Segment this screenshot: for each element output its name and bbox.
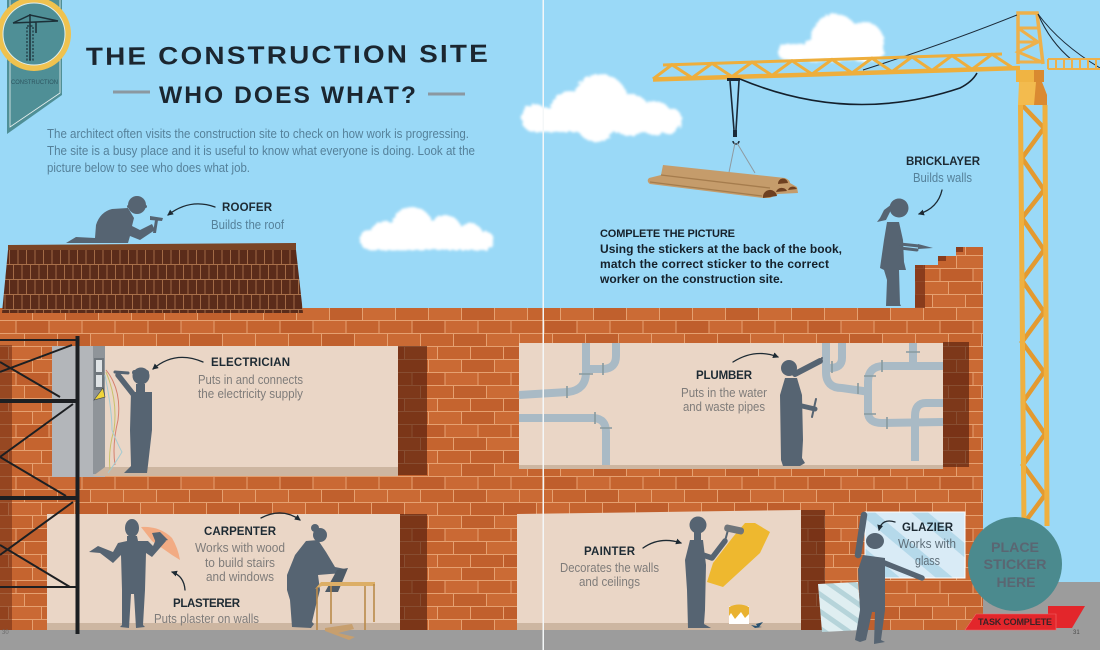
ground	[0, 582, 1100, 650]
hook block	[727, 78, 740, 144]
plumber silhouette	[780, 358, 822, 466]
sticker placeholder	[968, 517, 1062, 611]
label: plasterer	[154, 598, 259, 626]
work board	[325, 568, 348, 592]
room: painter	[517, 510, 825, 630]
label: electrician: ELECTRICIAN	[211, 357, 290, 369]
bricklayer stepped wall	[915, 247, 983, 308]
label: roofer: ROOFER	[222, 202, 273, 214]
medal	[0, 0, 71, 71]
roof	[2, 243, 303, 313]
glazier scene	[818, 512, 965, 644]
label: plumber	[681, 370, 767, 414]
wood planks on floor	[325, 624, 355, 640]
crane icon	[13, 14, 58, 60]
cloud top right behind crane	[778, 14, 884, 62]
table	[315, 582, 375, 630]
subtitle: WHO DOES WHAT?	[159, 82, 418, 109]
dark column	[943, 342, 969, 467]
label: electrician: the electricity supply	[198, 387, 304, 401]
window glass	[865, 512, 965, 578]
crane tower top	[1018, 13, 1043, 64]
tower crane	[648, 13, 1100, 526]
cloud by roofer	[360, 207, 494, 251]
centre page fold	[542, 0, 544, 650]
intro paragraph: The architect often visits the construction site to check on how work is progressing.	[47, 127, 469, 141]
plaster patch	[141, 527, 180, 560]
task complete banner: TASK COMPLETE	[978, 617, 1052, 627]
label: carpenter: CARPENTER	[204, 526, 277, 538]
cloud centre	[522, 74, 682, 142]
title line 1: THE CONSTRUCTION SITE	[86, 40, 490, 71]
carpenter silhouette	[287, 524, 345, 628]
painter silhouette	[685, 516, 725, 628]
dark column	[400, 514, 427, 630]
glazier silhouette	[855, 515, 922, 644]
arrow to plumber	[733, 353, 778, 362]
wall step shadows	[915, 247, 963, 308]
label: electrician	[198, 357, 304, 401]
complete the picture instructions: worker on the construction site.	[599, 272, 783, 286]
label: carpenter	[195, 526, 285, 584]
label: glazier: glass	[915, 554, 940, 568]
construction badge	[0, 0, 71, 134]
paint can	[729, 604, 749, 624]
trolley cable	[740, 73, 977, 104]
spare glass pane	[818, 582, 862, 632]
crane cables	[863, 14, 1100, 70]
label: bricklayer: Builds walls	[913, 171, 972, 185]
label: carpenter: to build stairs	[205, 556, 275, 570]
hazard sign	[94, 388, 105, 400]
label: roofer: Builds the roof	[211, 218, 284, 232]
intro paragraph: The site is a busy place and it is useful to know what everyone is doing. Look at the	[47, 144, 475, 158]
subtitle rules	[113, 92, 465, 94]
brick building	[0, 247, 983, 630]
arrow to electrician	[153, 357, 203, 369]
scaffolding	[0, 336, 78, 634]
label: plumber: and waste pipes	[683, 400, 765, 414]
label: painter: Decorates the walls	[560, 561, 659, 575]
arrow to carpenter	[261, 513, 300, 520]
page number right: 31	[1073, 630, 1080, 636]
arrow to bricklayer	[919, 190, 942, 214]
left pillar shadow	[0, 345, 12, 630]
paint roller	[724, 524, 745, 541]
arrow to roofer	[168, 204, 215, 215]
water pipes	[519, 343, 943, 465]
crane cab	[1016, 70, 1047, 105]
yellow paint	[707, 523, 770, 587]
electrician silhouette	[115, 368, 152, 473]
badge label: CONSTRUCTION	[11, 80, 58, 86]
roof ridge	[8, 243, 296, 250]
label: painter: and ceilings	[579, 575, 640, 589]
room: plumber	[519, 342, 969, 469]
title	[86, 40, 490, 109]
label: glazier: Works with	[898, 537, 956, 551]
complete the picture instructions	[599, 228, 842, 286]
label: plasterer: PLASTERER	[173, 598, 241, 610]
complete the picture instructions: COMPLETE THE PICTURE	[600, 228, 735, 240]
label: glazier: GLAZIER	[902, 522, 954, 534]
label: plasterer: Puts plaster on walls	[154, 612, 259, 626]
bricklayer silhouette	[877, 198, 933, 306]
complete the picture instructions: match the correct sticker to the correct	[600, 257, 829, 271]
label: plumber: Puts in the water	[681, 386, 767, 400]
intro paragraph: picture below to see who does what job.	[47, 161, 250, 175]
grey wall	[52, 346, 105, 477]
crane mast	[1020, 105, 1047, 526]
crane counter jib	[1048, 59, 1100, 69]
slings	[725, 143, 755, 192]
dark column	[801, 510, 825, 630]
page number left: 30	[2, 630, 9, 636]
paint brush	[751, 622, 763, 628]
task complete banner	[965, 606, 1085, 630]
main wall	[0, 308, 983, 630]
room wall	[105, 346, 398, 468]
label: glazier	[898, 522, 956, 568]
label: carpenter: Works with wood	[195, 541, 285, 555]
hammer	[150, 216, 163, 233]
load of wooden beams	[648, 165, 798, 198]
sticker placeholder: HERE	[996, 574, 1036, 590]
complete the picture instructions: Using the stickers at the back of the book,	[600, 242, 842, 256]
label: plumber: PLUMBER	[696, 370, 753, 382]
plasterer silhouette	[89, 519, 168, 628]
label: bricklayer: BRICKLAYER	[906, 156, 981, 168]
intro paragraph	[47, 127, 475, 175]
ribbon	[7, 0, 62, 134]
fuse boxes	[94, 358, 104, 390]
arrow to painter	[643, 540, 681, 548]
label: carpenter: and windows	[206, 570, 274, 584]
crane jib	[653, 54, 1020, 80]
arrow to glazier	[879, 521, 895, 530]
arrow to plasterer	[172, 572, 185, 590]
label: electrician: Puts in and connects	[198, 373, 303, 387]
floor	[93, 467, 398, 476]
label: painter	[560, 546, 659, 589]
label: roofer	[211, 202, 284, 232]
dark column	[398, 346, 427, 475]
sticker placeholder: PLACE	[991, 539, 1039, 555]
label: bricklayer	[906, 156, 981, 185]
roofer silhouette	[66, 196, 163, 243]
room: electrician	[52, 346, 427, 477]
sticker placeholder: STICKER	[984, 556, 1046, 572]
room: plasterer and carpenter	[47, 513, 427, 640]
wires	[105, 370, 122, 473]
label: painter: PAINTER	[584, 546, 636, 558]
